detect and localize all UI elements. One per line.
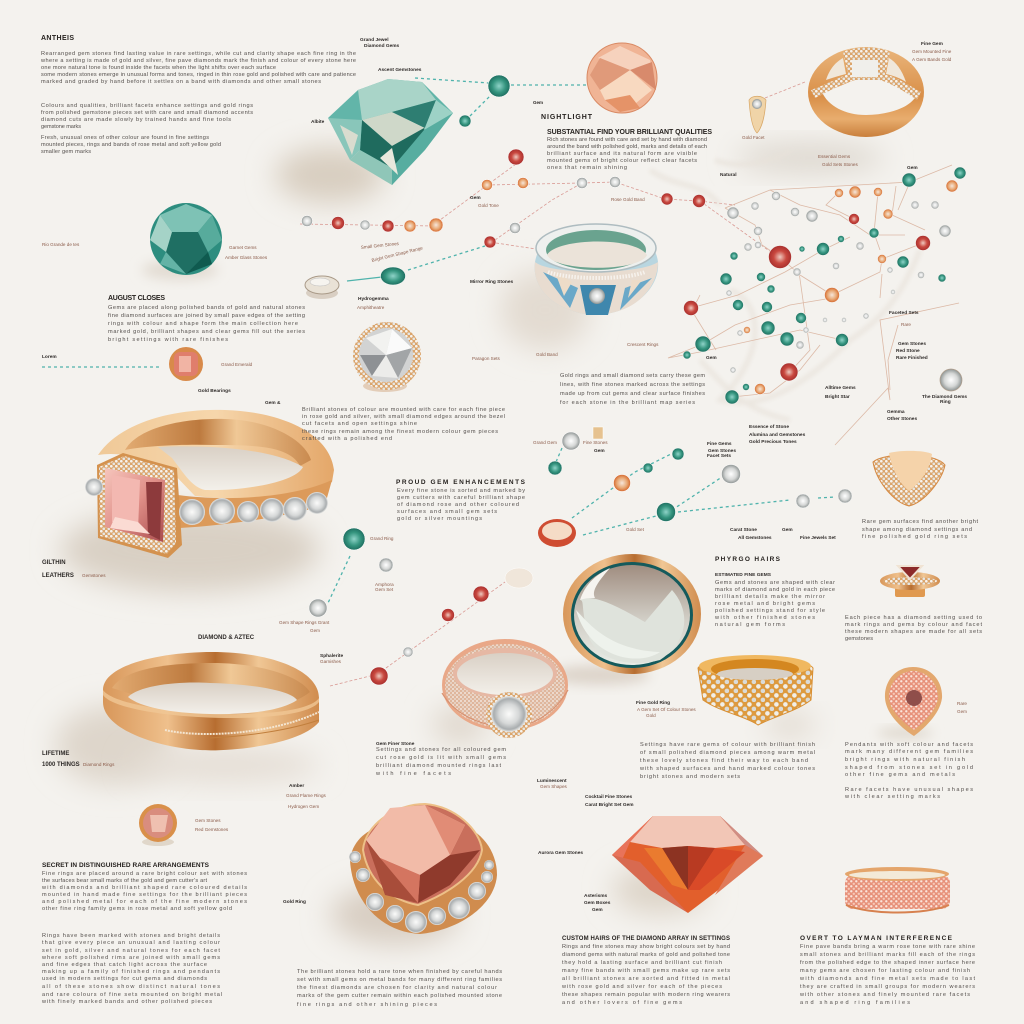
text block: lower right: mark many different gem families xyxy=(845,749,973,755)
labels around lower gems: Amber xyxy=(289,783,304,789)
labels around lower gems xyxy=(195,700,967,913)
text block: phyrgo: rose metal and bright gems xyxy=(715,601,815,607)
text block: intro three: mounted pieces, rings and bands of rose metal and soft yellow gold xyxy=(41,142,221,148)
text block: phyrgo: marks of diamond and gold in each piece xyxy=(715,587,835,593)
labels left upper: Rio Grande de tes xyxy=(42,242,80,247)
labels around large ring: 1000 THINGS xyxy=(42,762,80,768)
large pink gem gold ring xyxy=(85,410,334,558)
text block: bottom left one: mounted in hand made fine settings for the brilliant pieces xyxy=(42,892,247,898)
labels centre right: Fine Jewels Set xyxy=(800,535,836,541)
text block: intro two: from polished gemstone pieces set with care and small diamond accents xyxy=(41,110,253,116)
text block: bottom left two: making up a family of finished rings and pendants xyxy=(42,969,220,975)
small gold gem ring xyxy=(880,566,940,597)
text block: small gold ring: mark rings and gems by colour and facet xyxy=(845,622,982,628)
text block: bottom left two xyxy=(41,933,222,1005)
labels around large ring: GILTHIN xyxy=(42,560,66,566)
small gem chain upper xyxy=(302,75,620,285)
text block: lower centre: brilliant diamond mounted rings last xyxy=(376,763,501,769)
labels centre right: Gold Precious Tones xyxy=(749,439,797,445)
labels centre upper: Gold Tone xyxy=(478,203,499,208)
diamond map: Natural xyxy=(720,172,737,178)
labels around lower gems: Aurora Gem Stones xyxy=(538,850,583,856)
text block: phyrgo: Gems and stones are shaped with clear xyxy=(715,580,835,586)
text block: V ring: shape among diamond settings and xyxy=(862,527,972,533)
text block: centre ring copy: crafted with a polished end xyxy=(302,436,392,442)
text block: bottom right: many gems are chosen for lasting colour and finish xyxy=(800,968,970,974)
title: middle: SUBSTANTIAL FIND YOUR BRILLIANT QUALITIES xyxy=(547,129,712,136)
text block: bottom right: Fine pave bands bring a warm rose tone with rare shine xyxy=(800,944,975,950)
text block: phyrgo: natural gem forms xyxy=(715,622,785,628)
top right ring labels xyxy=(912,41,952,62)
heading: phyrgo hairs: PHYRGO HAIRS xyxy=(715,556,781,563)
text block: bottom right: they are crafted in small groups for modern wearers xyxy=(800,984,975,990)
text block: lower mid right: these lovely stones find their way to each band xyxy=(640,758,808,764)
labels centre right: Facet Sets xyxy=(707,453,731,459)
labels around lower gems: Gold Ring xyxy=(283,899,306,905)
text block: intro: Rearranged gem stones find lasting value in rare settings, while cut and clarity shape each fine ring in the xyxy=(41,51,356,57)
round halo diamond xyxy=(353,322,421,392)
labels around lower gems: A Gem Set Of Colour Stones xyxy=(637,707,696,712)
text block: bottom centre right: they hold a lasting surface and brilliant cut finish xyxy=(562,960,722,966)
small silver stone xyxy=(940,369,962,391)
labels around large ring: Diamond Rings xyxy=(83,762,115,767)
labels around lower gems: Gem Stones xyxy=(195,818,221,823)
small gem chain lower left xyxy=(309,528,533,685)
diamond map: Gem xyxy=(706,355,717,361)
labels centre right: Alumina and Gemstones xyxy=(749,432,806,438)
diamond map: The Diamond Gems xyxy=(922,394,967,400)
labels centre right: Fine Gems xyxy=(707,441,732,447)
labels centre right: Carat Stone xyxy=(730,527,757,533)
text block: lower centre: cut rose gold is lit with small gems xyxy=(376,755,506,761)
text block: lower right: other fine gems and metals xyxy=(845,772,955,778)
labels centre upper: Crescent Rings xyxy=(627,342,659,347)
text block: centre ring copy: cut facets and open settings shine xyxy=(302,421,417,427)
text block: august: bright settings with rare finishes xyxy=(108,337,228,343)
diamond map xyxy=(650,150,967,445)
text block: V ring xyxy=(862,519,978,540)
text block: lower right: shaped from stones set in gold xyxy=(845,765,973,771)
labels around large ring: Grand Ring xyxy=(370,536,394,541)
text block: bottom right: and shaped ring families xyxy=(800,1000,910,1006)
diamond map: Faceted Sets xyxy=(889,310,919,316)
labels around lower gems: Gem xyxy=(957,709,967,714)
text block: lower mid right: Settings have rare gems of colour with brilliant finish xyxy=(640,742,815,748)
text block: centre ring copy: Brilliant stones of colour are mounted with care for each fine piece xyxy=(302,407,505,413)
text block: phyrgo: brilliant details make the mirror xyxy=(715,594,825,600)
small ring icon xyxy=(305,276,339,299)
labels centre right: Fine Stones xyxy=(583,440,608,445)
labels around large ring: Garnishes xyxy=(320,659,342,664)
text block: lower mid right xyxy=(639,742,815,780)
labels around lower gems: Rare xyxy=(957,701,967,706)
heading: bottom centre right: CUSTOM HAIRS OF THE DIAMOND ARRAY IN SETTINGS xyxy=(562,936,730,942)
heading: proud gem: PROUD GEM ENHANCEMENTS xyxy=(396,479,526,486)
top right ring labels: A Gem Bands Gold xyxy=(912,57,952,62)
labels around lower gems: Grand Flame Rings xyxy=(286,793,327,798)
text block: august: Gems are placed along polished bands of gold and natural stones xyxy=(108,305,305,311)
text block: phyrgo xyxy=(714,580,835,628)
text block: phyrgo: polished settings stand for style xyxy=(715,608,825,614)
labels centre upper: Bright Gem Shape Range xyxy=(371,245,424,263)
text block: lower right: Rare facets have unusual shapes xyxy=(845,787,973,793)
round mirror gem xyxy=(563,554,701,674)
small gem bottom left xyxy=(139,804,177,846)
text block: map copy: lines, with fine stones marked across the settings xyxy=(560,382,705,388)
label: teal gem top xyxy=(311,37,422,125)
text block: bottom right: with diamonds and fine metal sets made to last xyxy=(799,976,975,982)
text block: map copy xyxy=(560,373,705,406)
text block: substantial: ones that remain shining xyxy=(547,165,627,171)
heading: phyrgo hairs: ESTIMATED FINE GEMS xyxy=(715,572,772,578)
labels around large ring: LEATHERS xyxy=(42,573,74,579)
peach round gem xyxy=(587,43,657,113)
text block: map copy: Gold rings and small diamond sets carry these gem xyxy=(560,373,705,379)
text block: lower centre: with fine facets xyxy=(375,771,451,777)
labels around lower gems: Asterisms xyxy=(584,893,608,899)
text block: bottom centre: fine rings and other shining pieces xyxy=(297,1002,437,1008)
text block: august xyxy=(108,305,305,343)
text block: centre ring copy: these rings remain among the finest modern colour gem pieces xyxy=(302,429,498,435)
labels centre right: Gem xyxy=(782,527,793,533)
text block: intro two: diamond cuts are made slowly by trained hands and fine tools xyxy=(41,117,231,123)
labels around large ring: Gem Shape Rings Grant xyxy=(279,620,330,625)
small diamond icon: Gold Facet xyxy=(742,135,765,140)
labels left upper: Gold Bearings xyxy=(198,388,231,394)
teal faceted ball xyxy=(150,203,222,275)
text block: proud gem: of diamond rose and other coloured xyxy=(397,502,519,508)
labels around lower gems: Fine Gold Ring xyxy=(636,700,670,706)
labels centre right: Grand Gem xyxy=(533,440,557,445)
text block: map copy: for each stone in the brilliant map series xyxy=(560,400,695,406)
text block: V ring: fine polished gold ring sets xyxy=(862,534,967,540)
labels centre right: Essence of Stone xyxy=(749,424,789,430)
text block: bottom centre: The brilliant stones hold a rare tone when finished by careful hands xyxy=(297,969,502,975)
text block: bottom centre right: these shapes remain popular with modern ring wearers xyxy=(562,992,730,998)
labels around lower gems: Cocktail Fine Stones xyxy=(585,794,633,800)
labels around lower gems: Luminescent xyxy=(537,778,567,784)
heading: bottom right: OVERT TO LAYMAN INTERFERENCE xyxy=(800,935,953,942)
text block: intro: where a setting is made of gold and silver, fine pave diamonds mark the finish and colour of every stone here xyxy=(40,58,356,64)
text block: bottom left two: and fine edges that catch light across the surface xyxy=(42,962,207,968)
text block: lower centre: Settings and stones for all coloured gem xyxy=(376,747,506,753)
labels around lower gems: Carat Bright Set Gem xyxy=(585,802,634,808)
text block: bottom centre: marks of the gem cutter remain within each polished mounted stone xyxy=(297,993,502,999)
labels centre upper: Rose Gold Band xyxy=(611,197,645,202)
text block: bottom centre right: diamond gems with natural marks of gold and polished tone xyxy=(562,952,730,958)
red dashed connectors xyxy=(300,82,805,686)
text block: small gold ring: these modern shapes are made for all sets xyxy=(845,629,982,635)
diamond map: Alltime Gems xyxy=(825,385,856,391)
diamond map: Essential Gems xyxy=(818,154,851,159)
labels left upper: Grand Emerald xyxy=(221,362,253,367)
heading: antheis: ANTHEIS xyxy=(41,35,74,42)
labels left upper: Garnet Gems xyxy=(229,245,257,250)
text block: bottom left one: other fine ring family gems in rose metal and soft yellow gold xyxy=(42,906,232,912)
text block: bottom centre: set with small gems on metal bands for many different ring families xyxy=(297,977,502,983)
text block: bottom left two: set in gold, silver and natural tones for each facet xyxy=(42,948,220,954)
text block: bottom centre right: all brilliant stones are sorted and fitted in metal xyxy=(562,976,730,982)
labels around lower gems: Gem Finer Stone xyxy=(376,741,415,747)
gem chain centre right xyxy=(548,427,852,522)
diamond map: Bright Star xyxy=(825,394,850,400)
text block: bottom left two: that give every piece an unusual and lasting colour xyxy=(42,940,220,946)
text block: bottom left two: with finely marked bands and other polished pieces xyxy=(41,999,212,1005)
labels centre right xyxy=(533,424,836,541)
text block: substantial: brilliant surface and its natural form are visible xyxy=(547,151,697,157)
diamond map: Ring xyxy=(940,399,951,405)
labels around large ring: Gem Set xyxy=(375,587,394,592)
text block: bottom left two: Rings have been marked with stones and bright details xyxy=(42,933,220,939)
label: teal gem top: Albite xyxy=(311,119,325,125)
gold pave V ring xyxy=(698,655,813,725)
label: teal gem top: Grand Jewel xyxy=(360,37,389,43)
labels around large ring: DIAMOND & AZTEC xyxy=(198,635,255,641)
text block: bottom left one: the surfaces bear small marks of the gold and gem cutter's art xyxy=(42,878,207,884)
red oval gem ring xyxy=(538,519,576,547)
text block: intro: some modern stones emerge in unusual forms and tones, ringed in thin rose gold and polished with care and patience xyxy=(41,72,356,78)
text block: proud gem: gem cutters with careful brilliant shape xyxy=(397,495,525,501)
text block: lower right: with clear setting marks xyxy=(844,794,940,800)
diamond map: Gem xyxy=(907,165,918,171)
labels centre right: Gold Set xyxy=(626,527,645,532)
labels centre upper: Paragon Sets xyxy=(472,356,501,361)
text block: bottom left two: all of these stones show distinct natural tones xyxy=(42,984,220,990)
text block: intro three: smaller gem marks xyxy=(41,149,91,155)
text block: bottom centre right xyxy=(561,944,730,1006)
small orange gem ring xyxy=(169,347,203,381)
rose gold diamond ring xyxy=(442,639,568,738)
labels around lower gems: Gem Shapes xyxy=(540,784,568,789)
text block: intro: one more natural tone is found inside the facets when the light shifts over each surface xyxy=(41,65,276,71)
heading: august closes: AUGUST CLOSES xyxy=(108,295,165,302)
text block: bottom right: from the polished edge to the shaped inner surface here xyxy=(800,960,975,966)
text block: bottom left one: and polished metal for each of the fine modern stones xyxy=(42,899,247,905)
text block: bottom centre right: Rings and fine stones may show bright colours set by hand xyxy=(562,944,730,950)
text block: bottom left one xyxy=(41,871,247,912)
text block: bottom centre right: with rose gold and silver for each of the pieces xyxy=(561,984,722,990)
labels centre upper: Gold Band xyxy=(536,352,558,357)
diamond map: Gemma xyxy=(887,409,905,415)
labels around lower gems: Red Gemstones xyxy=(195,827,229,832)
text block: bottom right xyxy=(799,944,975,1006)
labels around lower gems: Gem Boxes xyxy=(584,900,611,906)
diamond map: Rare xyxy=(901,322,911,327)
text block: bottom left two: used in modern settings for cut gems and diamonds xyxy=(42,976,207,982)
text block: lower right: Pendants with soft colour and facets xyxy=(845,742,973,748)
soft shadows xyxy=(55,144,933,945)
labels left upper xyxy=(42,242,281,406)
labels around lower gems: Gem xyxy=(592,907,603,913)
text block: bottom centre xyxy=(297,969,502,1008)
text block: small gold ring: Each piece has a diamond setting used to xyxy=(845,615,982,621)
text block: centre ring copy: in rose gold and silver, with small diamond edges around the bezel xyxy=(302,414,505,420)
title: middle: NIGHTLIGHT xyxy=(541,114,593,121)
V shaped gem ring xyxy=(873,451,945,506)
text block: substantial: Rich stones are found with care and set by hand with diamond xyxy=(547,137,707,143)
text block: V ring: Rare gem surfaces find another bright xyxy=(862,519,978,525)
labels around lower gems: Hydrogen Gem xyxy=(288,804,319,809)
labels centre right: All Gemstones xyxy=(738,535,772,541)
text block: phyrgo: with other finished stones xyxy=(714,615,815,621)
text block: map copy: made up from cut gems and clear surface finishes xyxy=(560,391,705,397)
red diamond gem xyxy=(612,816,763,913)
text block: centre ring copy xyxy=(302,407,505,442)
diamond map: Gold Sets Stones xyxy=(822,162,858,167)
top right ring labels: Fine Gem xyxy=(921,41,943,47)
labels left upper: Lorem xyxy=(42,354,57,360)
text block: substantial: around the band with polished gold, marks and details of each xyxy=(547,144,707,150)
text block: lower mid right: with shaped surfaces and hand marked colour tones xyxy=(639,766,815,772)
labels around large ring xyxy=(42,536,394,768)
text block: substantial xyxy=(547,137,707,171)
text block: intro two xyxy=(41,103,253,130)
label: teal gem top: Diamond Gems xyxy=(364,43,400,49)
text block: bottom centre right: many fine bands with small gems make up rare sets xyxy=(562,968,730,974)
labels left upper: Gem & xyxy=(265,400,281,406)
labels centre upper: Amphitheatre xyxy=(357,305,385,310)
text block: bottom left two: and rare colours of fine sets mounted on bright metal xyxy=(42,992,222,998)
text block: intro: marked and graded by hand before it settles on a band with diamonds and other small stones xyxy=(41,79,321,85)
text block: intro xyxy=(40,51,356,85)
text block: bottom left two: where soft polished rims are joined with small gems xyxy=(41,955,220,961)
labels centre upper: Hydrogemma xyxy=(358,296,389,302)
diamond map: Red Stone xyxy=(896,348,920,354)
labels around lower gems: Gold xyxy=(646,713,656,718)
text block: proud gem: gold or silver mountings xyxy=(397,516,482,522)
text block: lower right: bright rings with natural finish xyxy=(845,757,965,763)
diamond map: Rare Finished xyxy=(896,355,928,361)
text block: bottom right: small stones and brilliant marks fill each of the rings xyxy=(800,952,975,958)
text block: intro three xyxy=(41,135,221,155)
labels centre upper: Mirror Ring Stones xyxy=(470,279,514,285)
text block: lower right xyxy=(844,742,973,800)
silver blue ring xyxy=(535,224,658,315)
text block: lower mid right: of small polished diamond pieces among warm metal xyxy=(640,750,815,756)
text block: bottom left one: Fine rings are placed around a rare bright colour set with stones xyxy=(42,871,247,877)
text block: substantial: mounted gems of bright colour reflect clear facets xyxy=(547,158,697,164)
text block: august: fine diamond surfaces are joined by small pave edges of the setting xyxy=(108,313,305,319)
top right ring labels: Gem Mounted Fine xyxy=(912,49,952,54)
plain gold band ring xyxy=(103,652,319,750)
large red gem ring xyxy=(349,804,497,934)
labels centre right: Gem xyxy=(594,448,605,454)
text block: august: rings with colour and shape form the main collection here xyxy=(108,321,298,327)
title: middle xyxy=(533,100,712,136)
labels left upper: Amber Glass Stones xyxy=(225,255,268,260)
teal diamond gem xyxy=(328,79,453,185)
text block: intro two: gemstone marks xyxy=(41,124,81,130)
text block: proud gem xyxy=(397,488,525,522)
labels around large ring: Amphora xyxy=(375,582,394,587)
small diamond icon xyxy=(742,96,766,140)
heading: bottom left: SECRET IN DISTINGUISHED RARE ARRANGEMENTS xyxy=(42,862,210,869)
text block: august: marked gold, brilliant shapes and clear gems fill out the series xyxy=(108,329,305,335)
title: middle: Gem xyxy=(533,100,543,105)
labels around large ring: LIFETIME xyxy=(42,751,69,757)
labels around large ring: Sphalerite xyxy=(320,653,344,659)
text block: lower mid right: bright stones and modern sets xyxy=(640,774,740,780)
text block: intro three: Fresh, unusual ones of other colour are found in fine settings xyxy=(41,135,209,141)
text block: proud gem: Every fine stone is sorted and marked by xyxy=(397,488,525,494)
top right gold ring xyxy=(808,47,924,137)
labels centre upper: Gem xyxy=(470,195,481,201)
text block: lower centre xyxy=(375,747,506,777)
text block: bottom centre right: and other lovers of fine gems xyxy=(562,1000,682,1006)
text block: intro two: Colours and qualities, brilliant facets enhance settings and gold rings xyxy=(41,103,253,109)
teal dashed connectors xyxy=(42,78,835,603)
labels centre right: Gem Stones xyxy=(708,448,736,454)
labels around large ring: Gemstones xyxy=(82,573,106,578)
text block: bottom left one: with diamonds and brilliant shaped rare coloured details xyxy=(41,885,247,891)
diamond map: Other Stones xyxy=(887,416,917,422)
diamond map: Gem Stones xyxy=(898,341,926,347)
pave gold band xyxy=(845,867,950,912)
labels around large ring: Gem xyxy=(310,628,320,633)
pink teardrop gem xyxy=(885,667,942,736)
label: teal gem top: Ascent Gemstones xyxy=(378,67,422,73)
text block: small gold ring xyxy=(845,615,982,642)
heading: phyrgo hairs xyxy=(715,556,781,578)
text block: bottom centre: the finest diamonds are chosen for clarity and natural colour xyxy=(297,985,497,991)
text block: bottom right: with other stones and finely mounted rare facets xyxy=(799,992,970,998)
labels centre upper xyxy=(357,195,659,361)
text block: proud gem: surfaces and small gem sets xyxy=(397,509,497,515)
text block: small gold ring: gemstones xyxy=(845,636,873,642)
labels centre upper: Small Gem Stones xyxy=(361,241,400,250)
